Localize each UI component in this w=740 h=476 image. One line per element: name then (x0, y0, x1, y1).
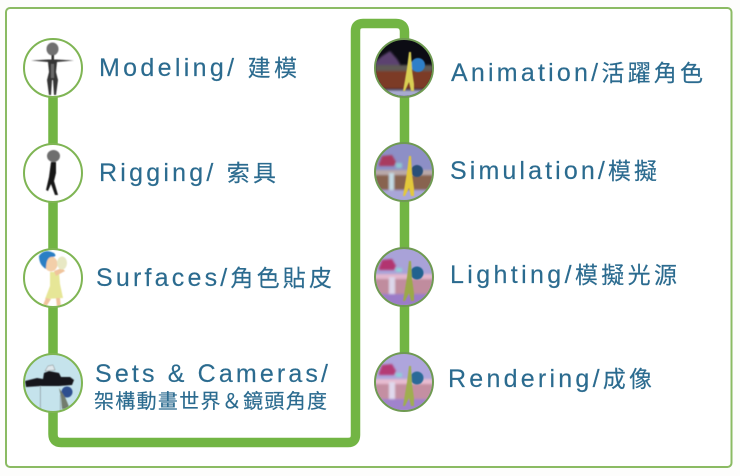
step: Lighting (375, 248, 677, 306)
step: Sets & Cameras (24, 354, 328, 413)
icon: final rendered frame (375, 353, 433, 411)
label: Rendering: Rendering/成像 (448, 365, 652, 393)
step: Surfaces (24, 249, 332, 307)
connector: green process path (53, 24, 404, 442)
step: Rigging (24, 144, 276, 202)
label: Animation: Animation/活躍角色 (451, 59, 703, 87)
step: Animation (375, 39, 703, 97)
icon: Joy character colour model (24, 249, 82, 307)
icon: black rig figure (24, 144, 82, 202)
label: Lighting: Lighting/模擬光源 (450, 261, 677, 289)
step: Modeling (24, 39, 297, 97)
label: Surfaces: Surfaces/角色貼皮 (96, 264, 332, 292)
icon: dark set on pale blue (24, 354, 82, 412)
label: Sets & Cameras Chinese: 架構動畫世界＆鏡頭角度 (94, 390, 327, 413)
icon: lit frame (375, 248, 433, 306)
step: Simulation (375, 143, 657, 201)
icon: simulation frame (375, 143, 433, 201)
label: Simulation: Simulation/模擬 (450, 157, 657, 185)
label: Sets & Cameras: Sets & Cameras/ (95, 360, 328, 388)
icon: dark unlit animation frame (375, 39, 433, 97)
label: Rigging: Rigging/ 索具 (99, 159, 276, 187)
label: Modeling: Modeling/ 建模 (99, 54, 297, 82)
step: Rendering (375, 353, 652, 411)
icon: grey T-pose model (24, 39, 82, 97)
